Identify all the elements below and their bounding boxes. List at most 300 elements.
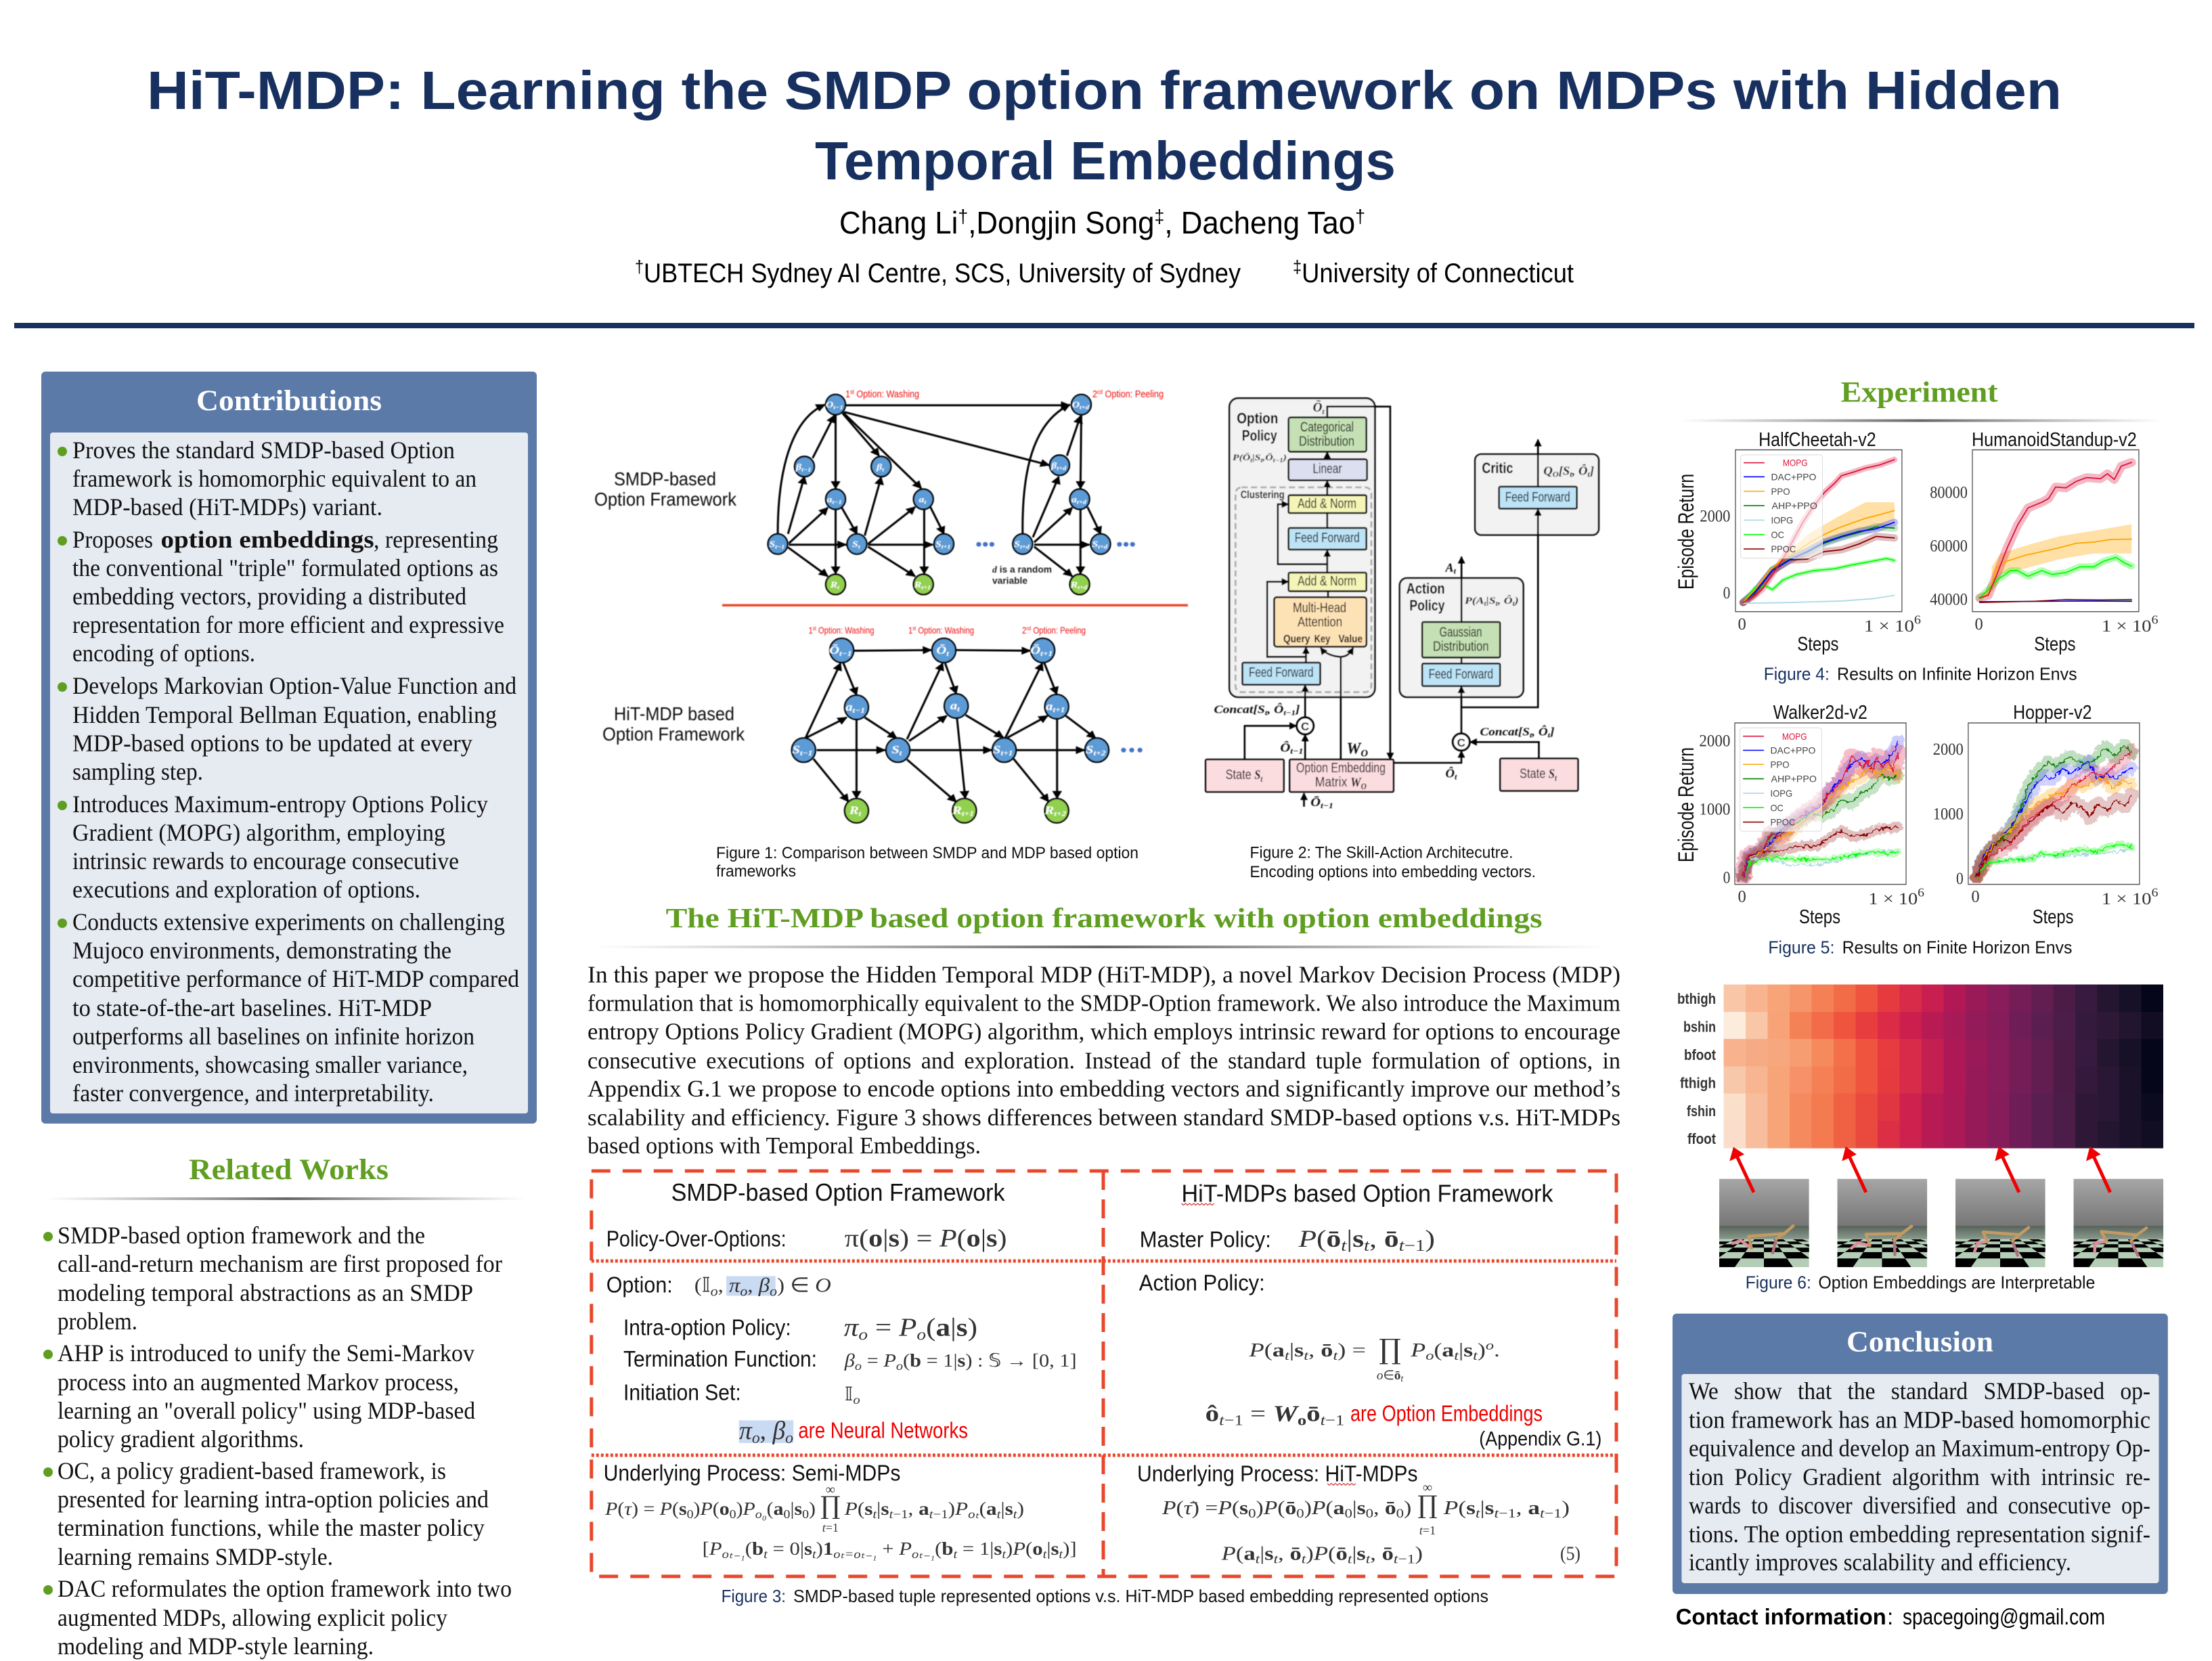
label: option names, SMDP bbox=[845, 389, 1164, 400]
chart: HumanoidStandup-v2: 1 × 10 bbox=[2102, 617, 2142, 636]
framework paragraph: consecutive executions of options and exploration. Instead of the standard tuple formulation of options, in bbox=[588, 1047, 1620, 1073]
authors: , Dacheng Tao bbox=[1164, 205, 1355, 240]
column: SMDP-based option framework: s bbox=[804, 1538, 812, 1559]
column: HiT-MDPs based option framework: | bbox=[1346, 1225, 1352, 1252]
note: d is a random variable bbox=[992, 564, 1052, 586]
column: SMDP-based option framework: −1 bbox=[893, 1507, 908, 1521]
column: SMDP-based option framework: [P bbox=[703, 1538, 720, 1559]
graph: HiT-MDP: t bbox=[946, 649, 950, 658]
column: SMDP-based option framework: 0 bbox=[802, 1507, 809, 1521]
column: SMDP-based option framework: ) bbox=[816, 1538, 823, 1559]
legend: HalfCheetah: MOPG bbox=[1783, 458, 1808, 468]
column: SMDP-based option framework: ) ∈ bbox=[777, 1275, 815, 1297]
heatmap row labels: fthigh bbox=[1680, 1074, 1716, 1091]
graph: HiT-MDP: t+1 bbox=[962, 810, 974, 818]
label: option names, SMDP: 1 bbox=[845, 389, 851, 400]
graph: HiT-MDP: S bbox=[993, 744, 1001, 757]
y axis labels bbox=[1674, 474, 1698, 862]
column: HiT-MDPs based option framework: t bbox=[1348, 1553, 1352, 1567]
column: HiT-MDPs based option framework: . bbox=[1494, 1340, 1500, 1361]
figure 2: skill-action architecture bbox=[1205, 398, 1599, 810]
graph: SMDP: S bbox=[1092, 539, 1098, 550]
contributions list: framework is homomorphic equivalent to an bbox=[72, 465, 477, 492]
math labels: O bbox=[1361, 749, 1368, 759]
column: HiT-MDPs based option framework: , bbox=[1369, 1225, 1384, 1252]
caption: figure 2 bbox=[1249, 843, 1536, 881]
column: HiT-MDPs based option framework: ō bbox=[1289, 1544, 1302, 1565]
chart: HumanoidStandup-v2: 0 bbox=[1975, 615, 1983, 634]
column: HiT-MDPs based option framework: o bbox=[1425, 1349, 1434, 1363]
label: option names, SMDP: cd bbox=[1097, 389, 1103, 395]
math labels: Concat[S bbox=[1214, 703, 1258, 716]
label: option names, HiT-MDP: 1 bbox=[808, 625, 814, 636]
column: SMDP-based option framework: P(o bbox=[1013, 1538, 1042, 1559]
math labels: t bbox=[1454, 566, 1457, 575]
graph: SMDP: t bbox=[837, 585, 839, 591]
column: HiT-MDPs based option framework: t bbox=[1321, 1411, 1326, 1428]
column: HiT-MDPs based option framework: −1 bbox=[1224, 1411, 1243, 1428]
heading: framework section: The HiT-MDP based option framework with option embeddings bbox=[666, 902, 1543, 933]
label: option names, SMDP: 2 bbox=[1092, 389, 1098, 400]
box labels: State S bbox=[1226, 768, 1262, 782]
graph: HiT-MDP: t+2 bbox=[1054, 810, 1066, 818]
arrows bbox=[1245, 407, 1539, 807]
chart: HumanoidStandup-v2 bbox=[1930, 428, 2159, 655]
column: HiT-MDPs based option framework: P(ō bbox=[1298, 1225, 1339, 1252]
graph: SMDP: t−1 bbox=[833, 500, 842, 506]
graph: HiT-MDP: t−1 bbox=[839, 649, 851, 658]
heatmap row labels: ffoot bbox=[1687, 1130, 1717, 1147]
graph: HiT-MDP: S bbox=[1086, 744, 1093, 757]
column: HiT-MDPs based option framework: , bbox=[1373, 1498, 1385, 1519]
column: SMDP-based option framework: P bbox=[883, 1350, 896, 1371]
column: HiT-MDPs based option framework: o bbox=[1298, 1411, 1306, 1428]
math labels: t bbox=[1260, 457, 1263, 464]
column: SMDP-based option framework: t bbox=[929, 1507, 934, 1521]
chart: Hopper-v2 bbox=[1933, 701, 2159, 927]
label: option names, SMDP: Option: Peeling bbox=[1103, 389, 1164, 400]
column: SMDP-based option framework: , bbox=[908, 1499, 919, 1519]
column: HiT-MDPs based option framework: −1 bbox=[1404, 1237, 1425, 1255]
column: SMDP-based option framework: o₀ bbox=[755, 1507, 767, 1521]
column: HiT-MDPs based option framework: t bbox=[1399, 1237, 1405, 1255]
chart: HumanoidStandup-v2: HumanoidStandup-v2 bbox=[1972, 428, 2137, 450]
chart: Hopper-v2: 0 bbox=[1956, 869, 1964, 888]
chart: HumanoidStandup-v2: 80000 bbox=[1930, 483, 1968, 502]
math labels: ] bbox=[1549, 725, 1555, 738]
simulation snapshot 2 bbox=[1823, 1179, 1939, 1268]
conclusion text: We show that the standard SMDP-based op- bbox=[1689, 1377, 2150, 1404]
chart: Walker2d-v2: 0 bbox=[1738, 887, 1746, 906]
column: SMDP-based option framework: 0 bbox=[730, 1507, 736, 1521]
contact information: Contact information bbox=[1676, 1604, 1886, 1629]
chart: HalfCheetah-v2: 1 × 10 bbox=[1864, 617, 1905, 636]
math labels: O bbox=[1553, 470, 1559, 479]
chart: Hopper-v2: Steps bbox=[2033, 906, 2073, 927]
framework paragraph: In this paper we propose the Hidden Temporal MDP (HiT-MDP), a novel Markov Decision Process (MDP) bbox=[588, 962, 1620, 988]
column: SMDP-based option framework: ) bbox=[809, 1499, 816, 1519]
column: HiT-MDPs based option framework: a bbox=[1442, 1340, 1454, 1361]
column: SMDP-based option framework: b bbox=[752, 1538, 764, 1559]
column: HiT-MDPs based option framework: t bbox=[1256, 1553, 1260, 1567]
box labels: Clustering bbox=[1241, 489, 1285, 501]
graph: SMDP: t+1 bbox=[942, 544, 951, 550]
column: HiT-MDPs based option framework: , bbox=[1278, 1544, 1289, 1565]
chart: Hopper-v2: 6 bbox=[2151, 886, 2159, 900]
column: HiT-MDPs based option framework: s bbox=[1294, 1340, 1304, 1361]
column: HiT-MDPs based option framework: −1 bbox=[1398, 1553, 1415, 1567]
legend: HalfCheetah: IOPG bbox=[1771, 515, 1793, 526]
label: option names, SMDP: Option: Washing bbox=[854, 389, 919, 400]
column: SMDP-based option framework: b = 1|s) : 𝕊 → [0, 1] bbox=[910, 1350, 1064, 1371]
column: SMDP-based option framework: P(o bbox=[701, 1499, 728, 1519]
graph: HiT-MDP: t−1 bbox=[853, 706, 865, 715]
math labels: t bbox=[1496, 600, 1499, 608]
label: SMDP-based option framework: Option Framework bbox=[594, 489, 737, 510]
column: HiT-MDPs based option framework: P(ō bbox=[1264, 1498, 1295, 1519]
contributions list: Mujoco environments, demonstrating the bbox=[72, 937, 451, 964]
column: SMDP-based option framework: 𝕀 bbox=[845, 1384, 852, 1405]
column: HiT-MDPs based option framework: | bbox=[1289, 1340, 1294, 1361]
authors: ,Dongjin Song bbox=[968, 205, 1155, 240]
chart: Hopper-v2: 1 × 10 bbox=[2102, 889, 2142, 908]
related works list: process into an augmented Markov process, bbox=[58, 1369, 459, 1396]
affiliations: ‡ bbox=[1293, 257, 1302, 277]
contributions list: sampling step. bbox=[72, 758, 203, 785]
column: SMDP-based option framework: π bbox=[729, 1275, 741, 1297]
column: SMDP-based option framework: ) bbox=[694, 1499, 701, 1519]
contributions list: MDP-based options to be updated at every bbox=[72, 730, 472, 757]
column: SMDP-based option framework: P bbox=[954, 1499, 968, 1519]
contributions list: faster convergence, and interpretability. bbox=[72, 1080, 434, 1107]
column: SMDP-based option framework: o bbox=[752, 1430, 760, 1447]
column: SMDP-based option framework: o bbox=[785, 1430, 793, 1447]
column: SMDP-based option framework: + bbox=[877, 1538, 899, 1559]
column: SMDP-based option framework: , bbox=[760, 1417, 772, 1445]
math labels: ,Ō bbox=[1262, 452, 1273, 462]
panel: action policy bbox=[1400, 578, 1524, 697]
heatmap row labels: fshin bbox=[1687, 1103, 1716, 1120]
column: SMDP-based option framework: a bbox=[986, 1499, 997, 1519]
column: SMDP-based option framework: b bbox=[942, 1538, 954, 1559]
math labels: Ô bbox=[1280, 741, 1289, 755]
label: option names, HiT-MDP bbox=[808, 625, 1086, 636]
affiliations: UBTECH Sydney AI Centre, SCS, University of Sydney bbox=[644, 259, 1241, 288]
heatmap row labels: bfoot bbox=[1684, 1046, 1717, 1063]
column: HiT-MDPs based option framework: ( bbox=[1434, 1340, 1442, 1361]
authors: † bbox=[1355, 206, 1365, 227]
column: HiT-MDPs based option framework: Action Policy: bbox=[1139, 1270, 1265, 1295]
graph: HiT-MDP: t bbox=[900, 749, 902, 757]
column: HiT-MDPs based option framework: P(s bbox=[1444, 1498, 1474, 1519]
column: SMDP-based option framework: Underlying Process: Semi-MDPs bbox=[604, 1461, 900, 1486]
simulation snapshot 4 bbox=[2060, 1179, 2175, 1268]
column: SMDP-based option framework: oₜ₋₁ bbox=[912, 1547, 935, 1561]
contributions list: the conventional "triple" formulated options as bbox=[72, 554, 498, 581]
note: d is a random variable: d is a random bbox=[992, 564, 1052, 575]
column: HiT-MDPs based option framework: o bbox=[1486, 1339, 1494, 1353]
column: HiT-MDPs based option framework: t bbox=[1366, 1553, 1371, 1567]
column: SMDP-based option framework: π bbox=[844, 1313, 859, 1342]
column: HiT-MDPs based option framework: ) bbox=[1415, 1544, 1423, 1565]
contributions list: to state-of-the-art baselines. HiT-MDP bbox=[72, 994, 432, 1021]
column: SMDP-based option framework: π(o|s) = P(o|s) bbox=[845, 1225, 1007, 1253]
graph: SMDP: a bbox=[919, 495, 924, 505]
box labels: Distribution bbox=[1433, 639, 1489, 654]
column: SMDP-based option framework: a bbox=[919, 1499, 929, 1519]
box labels: Linear bbox=[1313, 462, 1342, 477]
related works list: augmented MDPs, allowing explicit policy bbox=[58, 1604, 447, 1631]
box labels: t bbox=[1260, 774, 1263, 784]
column: HiT-MDPs based option framework: ) bbox=[1425, 1225, 1435, 1252]
simulation snapshot 3 bbox=[1942, 1179, 2057, 1268]
column: SMDP-based option framework: s bbox=[881, 1499, 889, 1519]
box labels: Distribution bbox=[1299, 435, 1354, 449]
box labels: Critic bbox=[1482, 460, 1513, 477]
column: HiT-MDPs based option framework: ō bbox=[1384, 1225, 1399, 1252]
math labels: , Ô bbox=[1531, 725, 1548, 738]
framework paragraph: scalability and efficiency. Figure 3 shows differences between standard SMDP-based options v.s. HiT-MDPs bbox=[588, 1104, 1620, 1130]
chart: HalfCheetah-v2: 0 bbox=[1723, 583, 1730, 602]
box labels: Feed Forward bbox=[1505, 490, 1570, 505]
column: SMDP-based option framework: Intra-option Policy: bbox=[623, 1314, 791, 1340]
math labels: |S bbox=[1486, 596, 1496, 606]
graph: HiT-MDP: Ō bbox=[829, 644, 839, 657]
column: HiT-MDPs based option framework: HiT-MDPs based Option Framework bbox=[1182, 1180, 1553, 1208]
column: HiT-MDPs based option framework: s bbox=[1264, 1544, 1274, 1565]
graph: HiT-MDP: R bbox=[1044, 804, 1054, 817]
graph: SMDP: t bbox=[882, 467, 884, 473]
related works list: learning an "overall policy" using MDP-based bbox=[58, 1397, 475, 1424]
column: SMDP-based option framework: ( bbox=[903, 1350, 910, 1371]
graph: SMDP: t+d bbox=[1057, 466, 1066, 472]
box labels: Option bbox=[1237, 410, 1278, 427]
column: SMDP-based option framework: | bbox=[1046, 1538, 1050, 1559]
column: HiT-MDPs based option framework: | bbox=[1260, 1544, 1264, 1565]
contributions list: , representing bbox=[374, 526, 498, 553]
contributions list: representation for more efficient and expressive bbox=[72, 611, 504, 638]
column: SMDP-based option framework: 0 bbox=[784, 1507, 790, 1521]
column: HiT-MDPs based option framework: −1 bbox=[1325, 1411, 1344, 1428]
label: HiT-MDP based option framework bbox=[602, 703, 745, 745]
math labels: , Ô bbox=[1497, 595, 1513, 606]
legend: Walker2d: MOPG bbox=[1782, 731, 1807, 742]
heatmap: option embeddings bbox=[1677, 984, 2163, 1148]
chart: Hopper-v2: 1000 bbox=[1933, 805, 1964, 824]
related works list: OC, a policy gradient-based framework, is bbox=[58, 1457, 446, 1484]
graph: HiT-MDP: t+1 bbox=[1040, 649, 1053, 658]
related works list: DAC reformulates the option framework into two bbox=[58, 1575, 512, 1602]
column: SMDP-based option framework: O bbox=[815, 1275, 831, 1297]
column: HiT-MDPs based option framework: ) bbox=[1256, 1498, 1264, 1519]
column: SMDP-based option framework: β bbox=[772, 1417, 785, 1445]
graph: HiT-MDP: t bbox=[957, 705, 960, 713]
column: SMDP-based option framework: ( bbox=[767, 1499, 774, 1519]
column: SMDP-based option framework: Option: bbox=[606, 1272, 673, 1298]
column: HiT-MDPs based option framework: W bbox=[1273, 1401, 1300, 1426]
related works list: termination functions, while the master policy bbox=[58, 1514, 485, 1541]
related works list: presented for learning intra-option policies and bbox=[58, 1486, 489, 1513]
column: HiT-MDPs based option framework: ō bbox=[1382, 1544, 1394, 1565]
graph: HiT-MDP: a bbox=[950, 700, 957, 712]
panel: option policy bbox=[1229, 398, 1375, 697]
heatmap row labels bbox=[1677, 990, 1717, 1147]
math labels: , Ô bbox=[1266, 703, 1283, 716]
column: SMDP-based option framework: o bbox=[855, 1359, 862, 1373]
math labels: A bbox=[1446, 560, 1454, 574]
math labels: ) bbox=[1283, 452, 1287, 462]
caption: figure 3: SMDP-based tuple represented options v.s. HiT-MDP based embedding represented options bbox=[793, 1586, 1488, 1606]
panel: conclusion bbox=[1673, 1314, 2168, 1594]
column: HiT-MDPs based option framework: t bbox=[1333, 1349, 1338, 1363]
graph: SMDP: t bbox=[924, 500, 927, 506]
column: SMDP-based option framework: | bbox=[877, 1499, 881, 1519]
chart: Walker2d-v2: 6 bbox=[1918, 886, 1925, 900]
label: option names, HiT-MDP: Option: Peeling bbox=[1031, 625, 1086, 636]
column: HiT-MDPs based option framework: ō bbox=[1321, 1340, 1333, 1361]
graph: SMDP: R bbox=[831, 580, 837, 590]
graph: SMDP: S bbox=[769, 539, 775, 550]
column: SMDP-based option framework: )] bbox=[1063, 1538, 1077, 1559]
graph: SMDP: t−1 bbox=[801, 467, 811, 473]
caption: figure 6: Option Embeddings are Interpretable bbox=[1818, 1272, 2095, 1293]
math labels: t bbox=[1530, 731, 1532, 739]
column: HiT-MDPs based option framework: ) bbox=[1562, 1498, 1570, 1519]
affiliations bbox=[635, 257, 1574, 288]
caption: figure 1 bbox=[716, 844, 1138, 881]
label: option names, SMDP: st bbox=[850, 389, 854, 395]
contributions list: Develops Markovian Option-Value Function and bbox=[72, 672, 516, 699]
framework paragraph: formulation that is homomorphically equivalent to the SMDP-Option framework. We also introduce the Maximum bbox=[588, 990, 1620, 1016]
column: HiT-MDPs based option framework: ) = bbox=[1337, 1340, 1366, 1361]
column: HiT-MDPs based option framework: a bbox=[1528, 1498, 1540, 1519]
column: SMDP-based option framework: 0 bbox=[687, 1507, 694, 1521]
arrows: snapshots to heatmap bbox=[1732, 1149, 2110, 1193]
math labels: ) bbox=[1513, 596, 1519, 606]
framework paragraph bbox=[588, 962, 1620, 1159]
column: HiT-MDPs based option framework: | bbox=[1480, 1498, 1485, 1519]
graph: SMDP: O bbox=[826, 400, 833, 410]
column: HiT-MDPs based option framework: s bbox=[1357, 1498, 1366, 1519]
box labels: Option Embedding bbox=[1296, 761, 1386, 776]
column: SMDP-based option framework: ∞ bbox=[826, 1482, 835, 1497]
graph: SMDP: t+d bbox=[1080, 405, 1089, 411]
math labels: t bbox=[1250, 457, 1253, 464]
column: HiT-MDPs based option framework: t bbox=[1304, 1349, 1309, 1363]
legend: Walker2d: PPO bbox=[1771, 759, 1790, 770]
math labels: t bbox=[1455, 772, 1457, 781]
column: SMDP-based option framework: o bbox=[711, 1285, 718, 1300]
column: SMDP-based option framework: SMDP-based Option Framework bbox=[671, 1178, 1006, 1206]
label: option names, HiT-MDP: 1 bbox=[908, 625, 914, 636]
graph: SMDP: S bbox=[1014, 539, 1020, 550]
box labels: Feed Forward bbox=[1249, 665, 1313, 680]
affiliations: † bbox=[635, 257, 644, 277]
column: SMDP-based option framework: s bbox=[1005, 1499, 1013, 1519]
legend: HalfCheetah: PPO bbox=[1771, 486, 1790, 497]
column: HiT-MDPs based option framework: | bbox=[1352, 1498, 1357, 1519]
related works list: modeling temporal abstractions as an SMDP bbox=[58, 1279, 473, 1306]
title: Temporal Embeddings bbox=[815, 131, 1396, 191]
math labels: W bbox=[1346, 740, 1361, 758]
math labels: Ō bbox=[1313, 400, 1323, 415]
column: SMDP-based option framework: P(s bbox=[845, 1499, 872, 1519]
column: HiT-MDPs based option framework: | bbox=[1459, 1340, 1463, 1361]
chart: Walker2d-v2 bbox=[1699, 701, 1925, 927]
box labels: Policy bbox=[1242, 427, 1277, 444]
column: SMDP-based option framework: ) bbox=[736, 1499, 743, 1519]
column: SMDP-based option framework: t bbox=[1002, 1547, 1007, 1561]
column: HiT-MDPs based option framework: ) bbox=[1478, 1340, 1486, 1361]
column: HiT-MDPs based option framework: t=1 bbox=[1419, 1524, 1436, 1537]
contributions list: Introduces Maximum-entropy Options Policy bbox=[72, 791, 488, 818]
affiliations: University of Connecticut bbox=[1302, 259, 1574, 288]
column: SMDP-based option framework: π bbox=[739, 1417, 753, 1445]
column: SMDP-based option framework: , bbox=[747, 1275, 759, 1297]
chart: HalfCheetah-v2: 6 bbox=[1914, 613, 1921, 627]
box labels: Feed Forward bbox=[1295, 531, 1360, 546]
column: HiT-MDPs based option framework: ) bbox=[1304, 1498, 1312, 1519]
y axis labels: Episode Return bbox=[1674, 747, 1698, 862]
contributions list: Hidden Temporal Bellman Equation, enabling bbox=[72, 701, 497, 728]
math labels: |S bbox=[1252, 452, 1260, 462]
label: option names, HiT-MDP: st bbox=[813, 625, 816, 632]
chart: HalfCheetah-v2: 2000 bbox=[1700, 507, 1730, 526]
related works list: AHP is introduced to unify the Semi-Markov bbox=[58, 1339, 474, 1367]
math labels: ] bbox=[1589, 464, 1594, 478]
column: HiT-MDPs based option framework: t bbox=[1394, 1553, 1398, 1567]
column: HiT-MDPs based option framework: t bbox=[1341, 1237, 1348, 1255]
column: SMDP-based option framework: o bbox=[896, 1359, 903, 1373]
graph: SMDP: t+d bbox=[1077, 500, 1086, 506]
authors: † bbox=[958, 206, 968, 227]
column: SMDP-based option framework: | bbox=[790, 1499, 794, 1519]
column: SMDP-based option framework: are Neural Networks bbox=[798, 1417, 968, 1442]
column: SMDP-based option framework: t bbox=[872, 1507, 877, 1521]
chart: Walker2d-v2: 0 bbox=[1723, 868, 1730, 887]
contributions list: intrinsic rewards to encourage consecutive bbox=[72, 847, 459, 874]
column: HiT-MDPs based option framework bbox=[1137, 1180, 1601, 1567]
box labels: Attention bbox=[1298, 615, 1342, 630]
conclusion text: wards to discover diversified and consecutive op- bbox=[1689, 1492, 2150, 1519]
box labels: Action bbox=[1407, 580, 1445, 597]
graph: HiT-MDP: S bbox=[792, 744, 800, 757]
column: SMDP-based option framework: 1 bbox=[823, 1538, 833, 1559]
graph: HiT-MDP: R bbox=[952, 804, 962, 817]
column: HiT-MDPs based option framework: Underlying Process: HiT-MDPs bbox=[1137, 1461, 1417, 1486]
column: HiT-MDPs based option framework: = bbox=[1243, 1401, 1273, 1426]
label: option names, HiT-MDP: st bbox=[912, 625, 916, 632]
graph: HiT-MDP: Ō bbox=[936, 644, 946, 657]
math labels: t bbox=[1513, 600, 1516, 608]
framework paragraph: entropy Options Policy Gradient (MOPG) algorithm, which employs intrinsic reward for options to encourage bbox=[588, 1019, 1620, 1045]
column: SMDP-based option framework: t bbox=[1013, 1507, 1018, 1521]
legend: HalfCheetah: PPOC bbox=[1771, 544, 1796, 554]
contributions list: encoding of options. bbox=[72, 640, 255, 667]
contributions list: option embeddings bbox=[161, 526, 374, 553]
column: HiT-MDPs based option framework: t bbox=[1285, 1349, 1290, 1363]
column: SMDP-based option framework: Initiation Set: bbox=[623, 1379, 741, 1405]
chart: HalfCheetah-v2: 0 bbox=[1738, 615, 1746, 634]
chart: HumanoidStandup-v2: 6 bbox=[2151, 613, 2159, 627]
graph: SMDP: R bbox=[1071, 580, 1078, 590]
framework paragraph: based options with Temporal Embeddings. bbox=[588, 1132, 981, 1159]
graph: SMDP: R bbox=[914, 580, 921, 590]
column: HiT-MDPs based option framework: s bbox=[1352, 1225, 1364, 1252]
chart: HalfCheetah-v2: Steps bbox=[1797, 633, 1839, 655]
legend: HalfCheetah: AHP+PPO bbox=[1772, 501, 1817, 511]
related works list: SMDP-based option framework and the bbox=[58, 1222, 425, 1249]
